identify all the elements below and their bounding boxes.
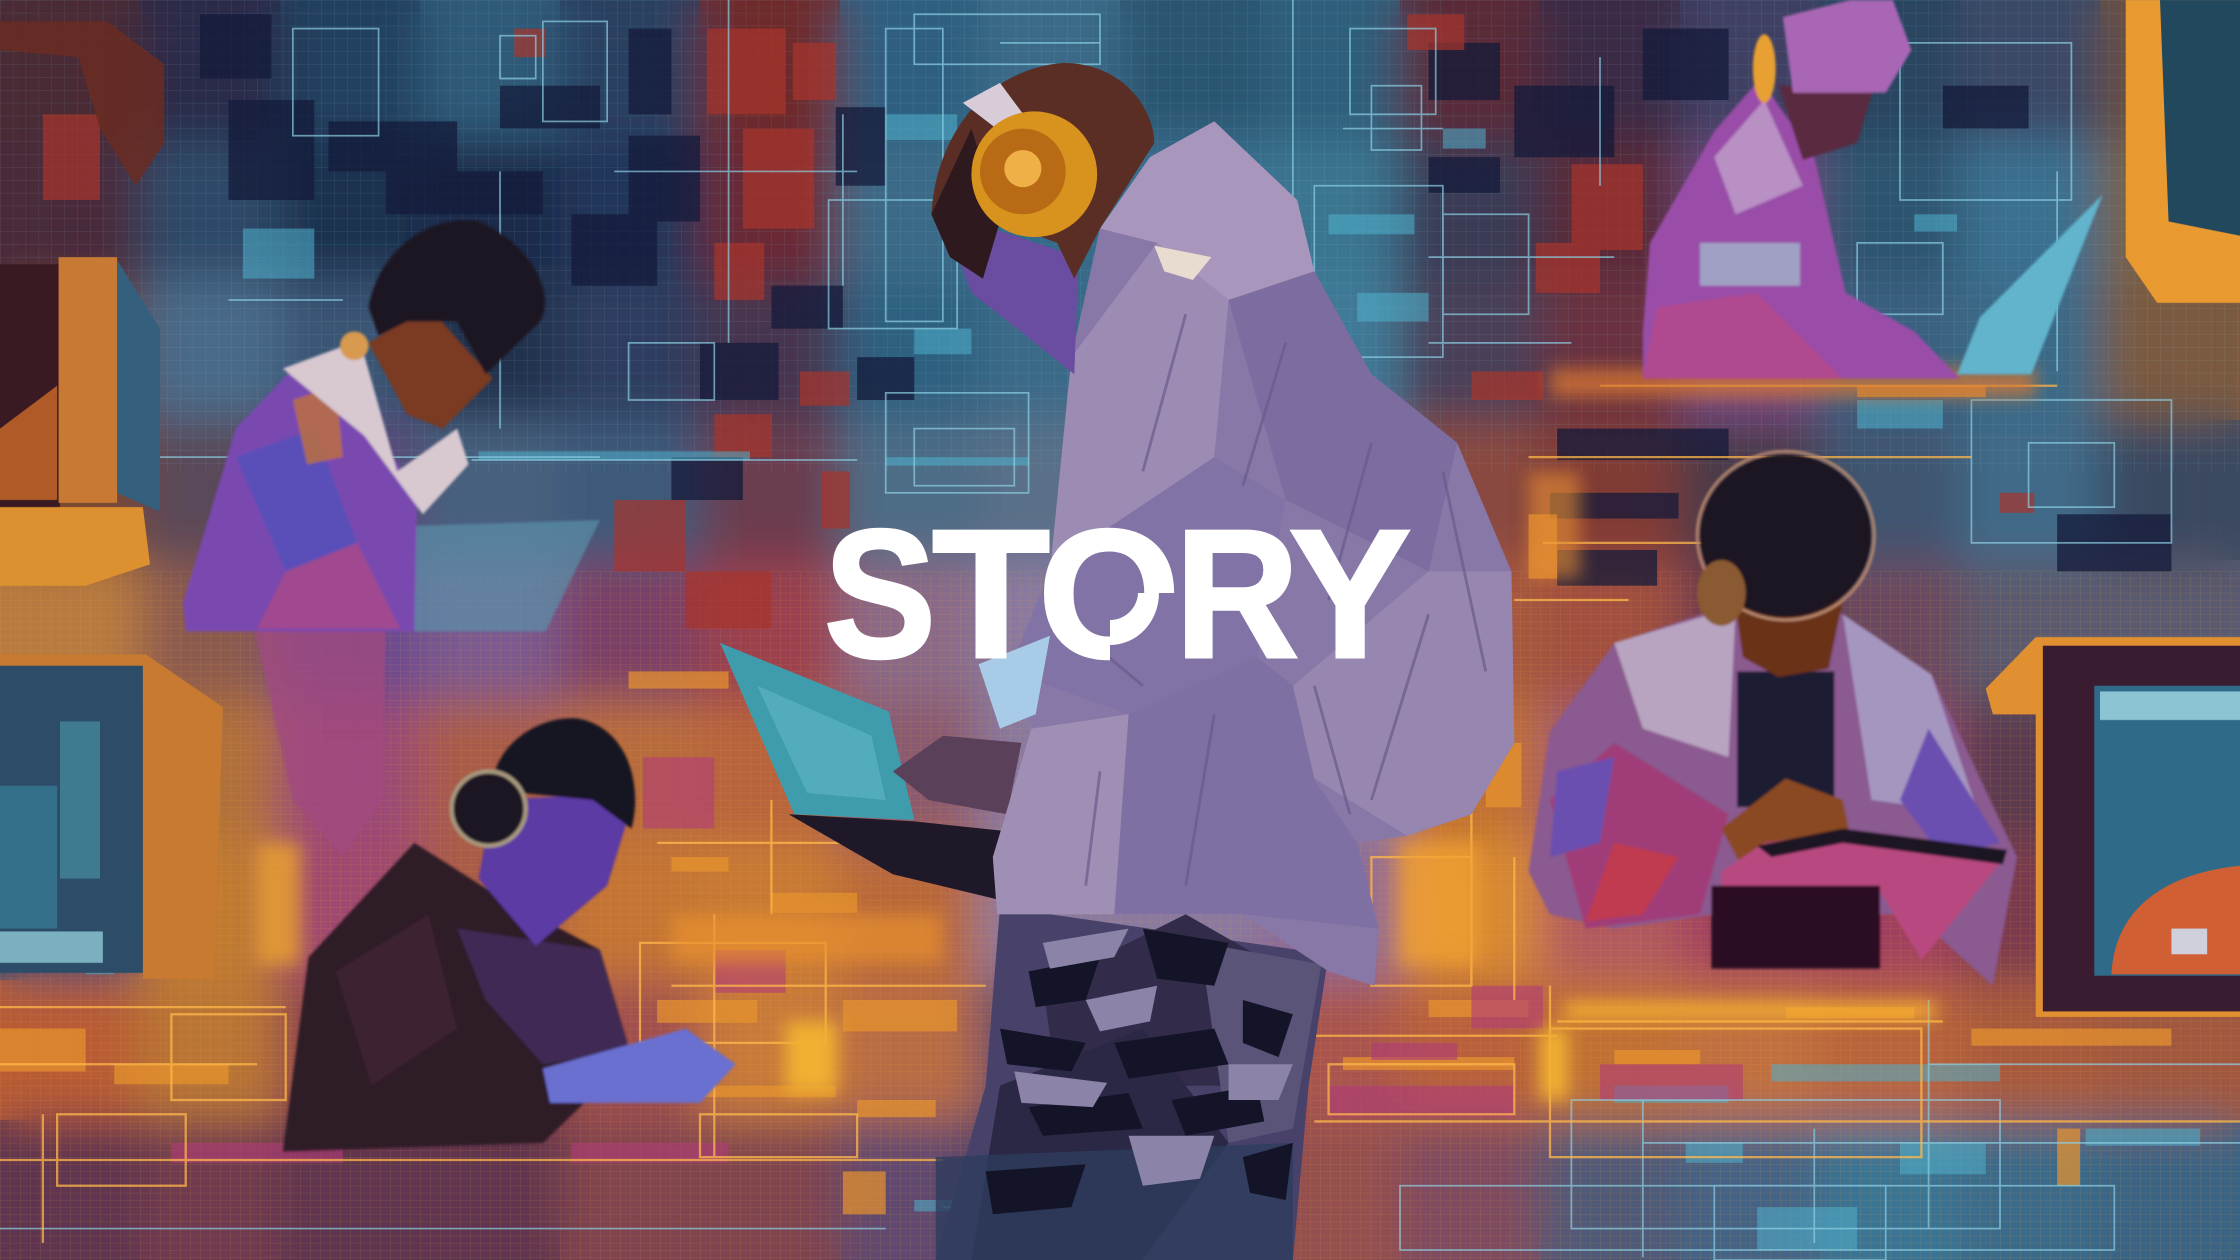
monitor orange side <box>59 257 117 503</box>
monitor frame <box>1986 637 2240 1017</box>
panel: lower right monitor <box>1986 637 2240 1017</box>
panel: upper left monitor <box>0 21 164 586</box>
collar <box>283 340 469 514</box>
cap <box>1783 0 1911 93</box>
helmet hair <box>1700 454 1871 617</box>
shirt <box>1737 671 1834 807</box>
laptop base <box>789 814 1009 900</box>
logo letters: Y <box>1289 491 1411 696</box>
hair <box>492 718 635 829</box>
face <box>1779 86 1874 160</box>
logo letters: O <box>1038 491 1180 696</box>
logo: STORY wordmark <box>827 528 1411 660</box>
tablet glow <box>543 1029 736 1103</box>
monitor base <box>0 507 150 586</box>
monitor body <box>2043 646 2240 1011</box>
figure: lower left person with tablet <box>283 718 736 1151</box>
jacket <box>283 843 631 1151</box>
lower body <box>254 629 386 857</box>
panel: lower left monitor <box>0 654 223 979</box>
earcup <box>1697 560 1746 626</box>
jacket folds <box>1057 314 1486 886</box>
trousers shards <box>986 929 1293 1214</box>
jacket <box>1529 603 2017 986</box>
jacket <box>993 121 1514 986</box>
logo letters: S <box>824 491 936 696</box>
figure: central person with headphones <box>720 63 1514 1260</box>
monitor screen <box>117 260 160 511</box>
monitor frame <box>0 654 223 979</box>
jacket facets <box>1100 121 1314 300</box>
tablet <box>1721 831 2007 960</box>
laptop screen <box>720 643 914 820</box>
figure: top right person with laptop <box>1643 0 2103 379</box>
monitor screen <box>0 666 143 973</box>
laptop <box>414 520 600 631</box>
hair <box>369 221 545 374</box>
monitor orange arc <box>2111 866 2240 974</box>
top arch <box>0 21 164 186</box>
figure: left person with laptop <box>183 221 600 857</box>
jacket <box>183 369 417 631</box>
hand <box>1721 779 1850 869</box>
logo letters <box>827 528 1411 660</box>
logo letters: R <box>1175 491 1299 696</box>
headphone <box>1753 34 1776 103</box>
face <box>950 229 1079 374</box>
earphone <box>340 331 369 360</box>
headphone band <box>963 83 1029 131</box>
laptop <box>1957 194 2103 374</box>
logo O notch segment <box>1110 593 1159 645</box>
trousers <box>936 907 1329 1260</box>
logo letters: T <box>932 491 1050 696</box>
face <box>479 793 636 946</box>
jacket <box>1643 79 1960 379</box>
monitor interior <box>0 264 60 507</box>
headphone cup <box>971 111 1097 237</box>
hand <box>893 736 1021 814</box>
face <box>1736 600 1843 677</box>
bright orange glow bands <box>257 369 2036 1100</box>
hair <box>931 63 1154 279</box>
monitor screen <box>2094 686 2240 976</box>
headphone <box>451 771 526 846</box>
box <box>1711 886 1880 969</box>
panel: upper right monitor <box>2126 0 2240 303</box>
figure: right person with tablet <box>1529 451 2017 986</box>
face <box>369 307 493 429</box>
chest glow <box>979 636 1050 729</box>
